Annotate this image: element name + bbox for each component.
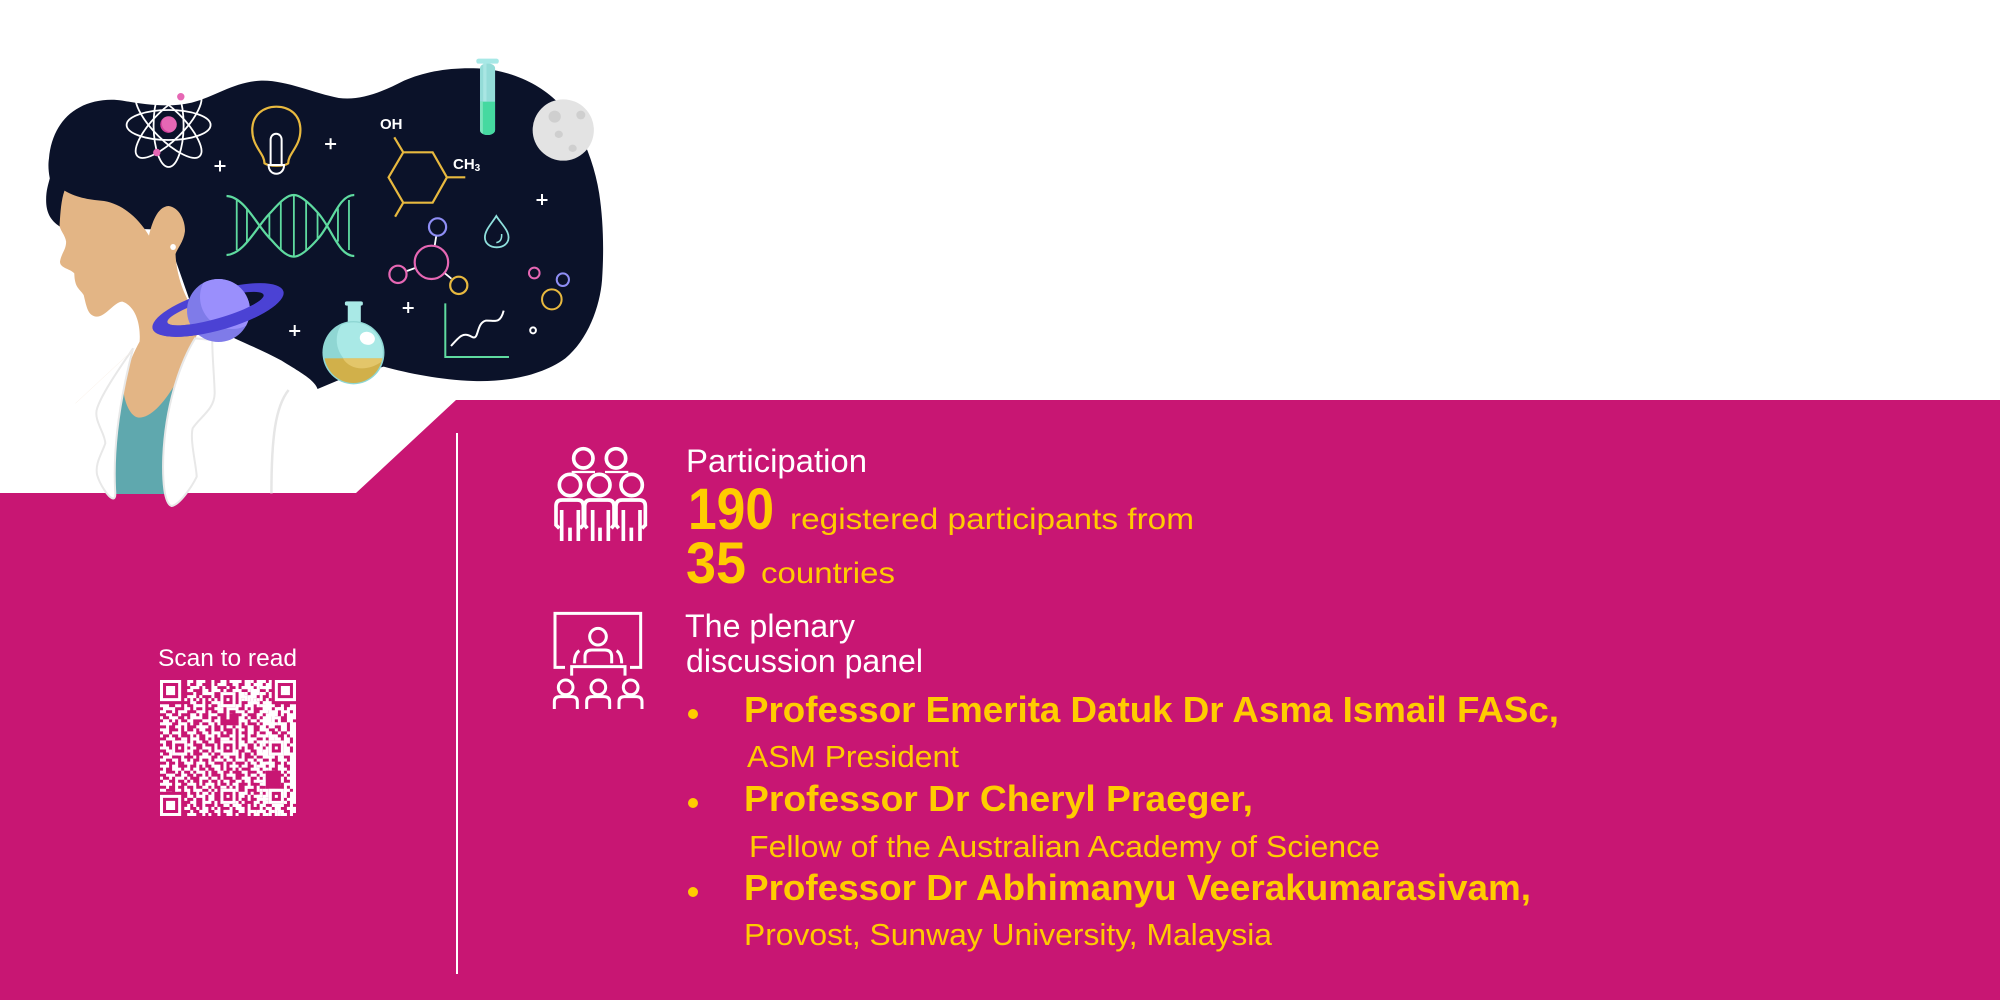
stat: 190 registered participants: registered participants from [790, 503, 1194, 536]
vertical divider [456, 433, 458, 974]
icon: ringed planet [152, 279, 284, 342]
panelist 3: Professor Dr Abhimanyu Veerakumarasivam, [744, 867, 1531, 908]
icon: round flask [322, 301, 384, 384]
icon: molecule [389, 218, 467, 294]
panelist 1: ASM President [747, 739, 959, 774]
icon: light bulb [252, 107, 300, 174]
panelist 2 [688, 778, 1380, 864]
teal shirt [115, 383, 176, 494]
hair [46, 68, 603, 389]
icon: plenary panel [554, 613, 642, 709]
scan to read label: Scan to read [158, 645, 297, 672]
icon: bubbles [529, 268, 569, 333]
panelist 2: Fellow of the Australian Academy of Science [749, 829, 1380, 864]
icon: water droplet [485, 216, 509, 247]
skin: face and neck [60, 191, 198, 418]
faint coat edge [76, 348, 135, 403]
label: CH3: CH [453, 156, 475, 173]
panelist 2: Professor Dr Cheryl Praeger, [744, 778, 1253, 819]
panelist 3: Provost, Sunway University, Malaysia [744, 917, 1273, 952]
icon: DNA helix [227, 195, 354, 257]
label: CH3: 3 [475, 163, 481, 174]
panelist 3 [688, 867, 1531, 952]
QR code [160, 680, 299, 816]
coat left lapel [96, 348, 133, 498]
heading: The plenary discussion panel: discussion panel [686, 643, 923, 679]
coat sleeve crease [271, 390, 289, 493]
magenta background panel [0, 400, 2000, 1000]
heading: The plenary discussion panel: The plenary [685, 608, 855, 644]
icon: group of participants [556, 449, 645, 541]
panelist 1: Professor Emerita Datuk Dr Asma Ismail FASc, [744, 689, 1559, 730]
coat right lapel [163, 338, 215, 506]
icon: moon [533, 99, 594, 161]
icon: line chart [445, 303, 509, 357]
stat: 190 registered participants [688, 477, 1194, 542]
panelist 1 [688, 689, 1559, 774]
scientist figure [46, 68, 603, 506]
illustration: scientist with science-filled hair [46, 59, 603, 506]
right-hand QR modules [242, 682, 299, 814]
stat: 35 countries: countries [761, 557, 895, 590]
heading: Participation: Participation [686, 443, 867, 479]
stat: 35 countries [686, 531, 895, 596]
stat: 35 countries: 35 [686, 531, 746, 596]
icon: test tube [476, 59, 499, 135]
label: OH: OH [380, 116, 402, 133]
stat: 190 registered participants: 190 [688, 477, 774, 542]
earring [170, 244, 176, 250]
icon: chemical hexagon [389, 137, 465, 217]
heading: The plenary discussion panel [685, 608, 923, 679]
icon: plus signs [214, 138, 548, 336]
icon: atom [127, 83, 211, 167]
